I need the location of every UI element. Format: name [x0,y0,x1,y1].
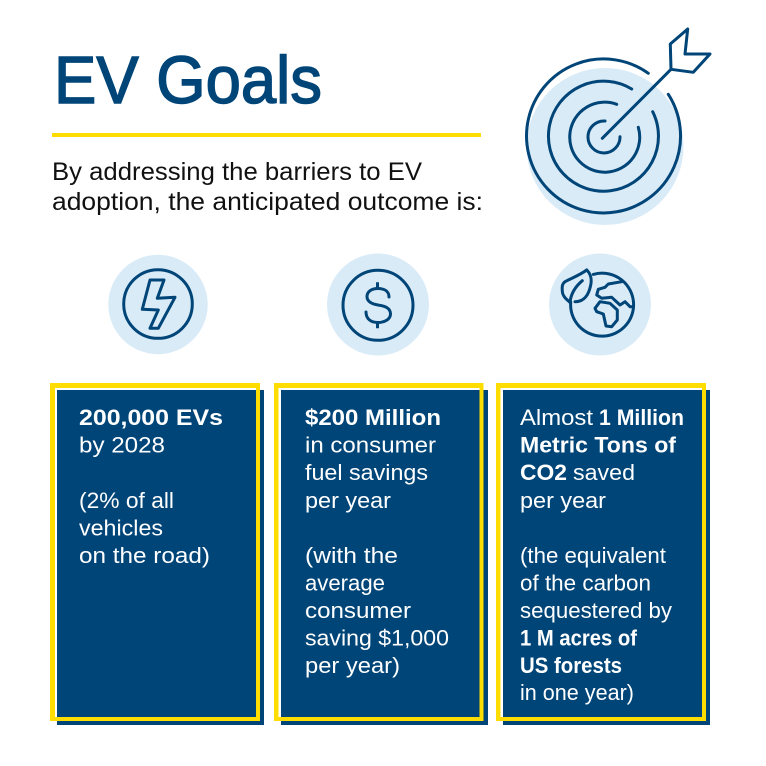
card text: fuel savings goal: fuel savings [305,460,428,485]
card text: fuel savings goal: average [305,570,385,596]
title underline [52,133,481,137]
card text: EVs goal: vehicles [79,516,163,540]
card text: EVs goal: (2% of all [79,488,174,513]
card text: EVs goal [79,405,223,568]
intro text: By addressing the barriers to EV [52,158,422,186]
card text: EVs goal: on the road) [79,543,210,568]
card text: fuel savings goal: in consumer [305,432,436,458]
card text: CO2 goal: per year [520,488,606,513]
icon: dollar coin [327,254,429,356]
card text: CO2 goal: Metric Tons of [520,432,677,458]
card text: CO2 goal: saved [573,460,635,485]
icon: lightning bolt [108,255,208,354]
card text: CO2 goal: 1 Million [599,405,684,430]
card text: fuel savings goal: (with the [305,543,398,568]
card text: fuel savings goal: $200 Million [305,405,441,430]
intro text [52,158,483,216]
card text: CO2 goal: US forests [520,653,622,678]
icon: target with arrow [526,29,710,225]
card text: fuel savings goal: per year) [305,653,400,678]
card text: fuel savings goal [305,405,449,678]
card text: CO2 goal [520,405,684,705]
card text: CO2 goal: sequestered by [520,598,672,623]
card text: fuel savings goal: consumer [305,598,411,623]
card text: fuel savings goal: saving $1,000 [305,626,449,650]
icon: globe with leaf [549,254,651,356]
card text: CO2 goal: in one year) [520,680,634,705]
title: EV Goals [54,43,322,118]
intro text: adoption, the anticipated outcome is: [52,188,483,216]
card text: CO2 goal: (the equivalent [520,543,666,568]
card text: CO2 goal: of the carbon [520,570,651,596]
card text: CO2 goal: 1 M acres of [520,626,638,650]
card text: EVs goal: 200,000 EVs [79,405,223,430]
panel: 1 Million Metric Tons [496,383,710,725]
card text: EVs goal: by 2028 [79,432,165,458]
panel: $200 Million [274,383,488,725]
card text: fuel savings goal: per year [305,488,391,513]
panel: 200,000 EVs [50,383,264,725]
card text: CO2 goal: CO2 [520,460,567,485]
card text: CO2 goal: Almost [520,405,593,430]
